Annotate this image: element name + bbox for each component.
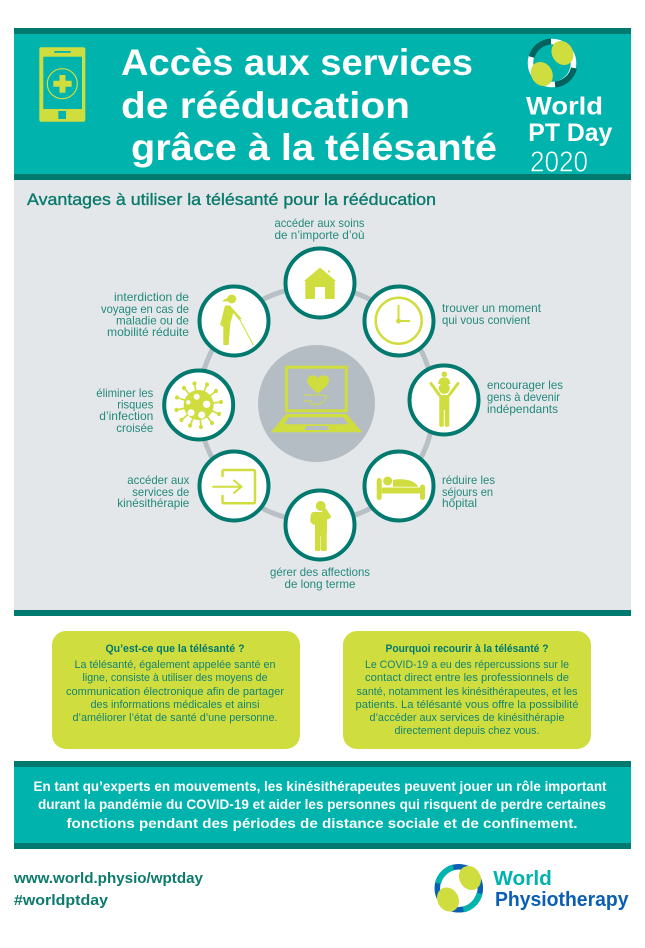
- item: convenient time: [364, 286, 542, 356]
- callout: why use telehealth: Pourquoi recourir à la télésanté ?: [386, 643, 548, 655]
- item: reduce cross-infection risk: [96, 370, 233, 440]
- panel: physiotherapists statement band: fonctions pendant des périodes de distance sociale et de confinement.: [66, 816, 578, 831]
- item: travel restrictions: voyage en cas de: [101, 303, 189, 316]
- callout: why use telehealth: santé, notamment les kinésithérapeutes, et les: [356, 686, 578, 698]
- logo: World PT Day 2020: World: [526, 92, 603, 120]
- panel: physiotherapists statement band: durant la pandémie du COVID-19 et aider les personnes qui risquent de perdre certaines: [38, 797, 606, 812]
- item: convenient time: qui vous convient: [442, 314, 531, 327]
- item: reduce hospital stays: réduire les: [442, 474, 495, 487]
- item: reduce cross-infection risk: d’infection: [99, 410, 153, 423]
- callout: why use telehealth: [343, 631, 591, 749]
- callout: why use telehealth: Le COVID-19 a eu des répercussions sur le: [365, 659, 569, 671]
- title: Accès aux services: [121, 41, 473, 83]
- item: convenient time: trouver un moment: [442, 302, 542, 315]
- logo: World PT Day 2020: PT Day: [528, 119, 612, 147]
- item: travel restrictions: maladie ou de: [116, 314, 189, 328]
- item: access physiotherapy services: accéder aux: [127, 474, 189, 487]
- item: encourage independence: [410, 366, 563, 434]
- item: reduce cross-infection risk: croisée: [116, 422, 153, 435]
- panel: benefits of telehealth: [14, 180, 631, 616]
- callout: what is telehealth: Qu’est-ce que la télésanté ?: [106, 643, 244, 655]
- heading: benefits: Avantages à utiliser la télésanté pour la rééducation: [27, 191, 436, 209]
- footer links: #worldptday: [14, 892, 109, 909]
- item: encourage independence: encourager les: [487, 379, 563, 392]
- logo: World PT Day 2020: [526, 37, 612, 178]
- item: access physiotherapy services: services de: [132, 486, 189, 499]
- callout: what is telehealth: communication électronique afin de partager: [66, 686, 284, 698]
- callout: what is telehealth: La télésanté, également appelée santé en: [74, 659, 276, 671]
- connecting ring: [199, 286, 434, 522]
- logo: World Physiotherapy: Physiotherapy: [495, 889, 629, 911]
- item: manage long-term conditions: [270, 490, 370, 591]
- item: encourage independence: gens à devenir: [487, 391, 560, 404]
- item: access from anywhere: de n’importe d’où: [274, 229, 364, 242]
- callout: why use telehealth: contact direct entre les professionnels de: [365, 672, 569, 684]
- item: manage long-term conditions: gérer des affections: [270, 566, 370, 579]
- callout: what is telehealth: [52, 631, 300, 749]
- item: travel restrictions: mobilité réduite: [107, 326, 189, 339]
- title: grâce à la télésanté: [131, 126, 497, 168]
- panel: physiotherapists statement band: En tant qu’experts en mouvements, les kinésithérapeutes peuvent jouer un rôle important: [34, 779, 607, 794]
- icon: central laptop with heart: [258, 345, 375, 462]
- item: reduce hospital stays: [364, 452, 495, 520]
- footer links: [13, 870, 204, 909]
- callout: what is telehealth: d’améliorer l’état de santé d’une personne.: [72, 712, 278, 724]
- panel: header banner: [14, 28, 631, 180]
- icon: smartphone with medical cross: [39, 47, 85, 122]
- callout: what is telehealth: des informations médicales et ainsi: [90, 699, 260, 711]
- panel: physiotherapists statement band: [14, 761, 631, 849]
- item: reduce hospital stays: séjours en: [442, 486, 493, 499]
- callout: what is telehealth: ligne, consiste à utiliser des moyens de: [82, 672, 268, 684]
- title: [121, 41, 497, 168]
- item: access from anywhere: accéder aux soins: [274, 217, 365, 230]
- callout: why use telehealth: d’accéder aux services de kinésithérapie: [370, 712, 565, 724]
- item: manage long-term conditions: de long terme: [284, 578, 356, 591]
- item: reduce hospital stays: hôpital: [442, 497, 477, 510]
- item: travel restrictions: [101, 286, 268, 356]
- logo: World Physiotherapy: World: [493, 868, 552, 890]
- item: access physiotherapy services: kinésithérapie: [117, 497, 189, 510]
- item: reduce cross-infection risk: éliminer les: [96, 387, 153, 400]
- item: access from anywhere: [274, 217, 365, 318]
- callout: why use telehealth: directement depuis chez vous.: [394, 725, 540, 737]
- item: travel restrictions: interdiction de: [114, 291, 189, 304]
- logo: World PT Day 2020: 2020: [530, 146, 588, 178]
- item: reduce cross-infection risk: risques: [117, 398, 153, 412]
- item: access physiotherapy services: [117, 452, 268, 520]
- logo: World Physiotherapy: [433, 862, 629, 916]
- title: de rééducation: [121, 84, 410, 126]
- footer links: www.world.physio/wptday: [13, 870, 204, 887]
- item: encourage independence: indépendants: [487, 403, 558, 416]
- callout: why use telehealth: patients. La télésanté vous offre la possibilité: [356, 699, 579, 711]
